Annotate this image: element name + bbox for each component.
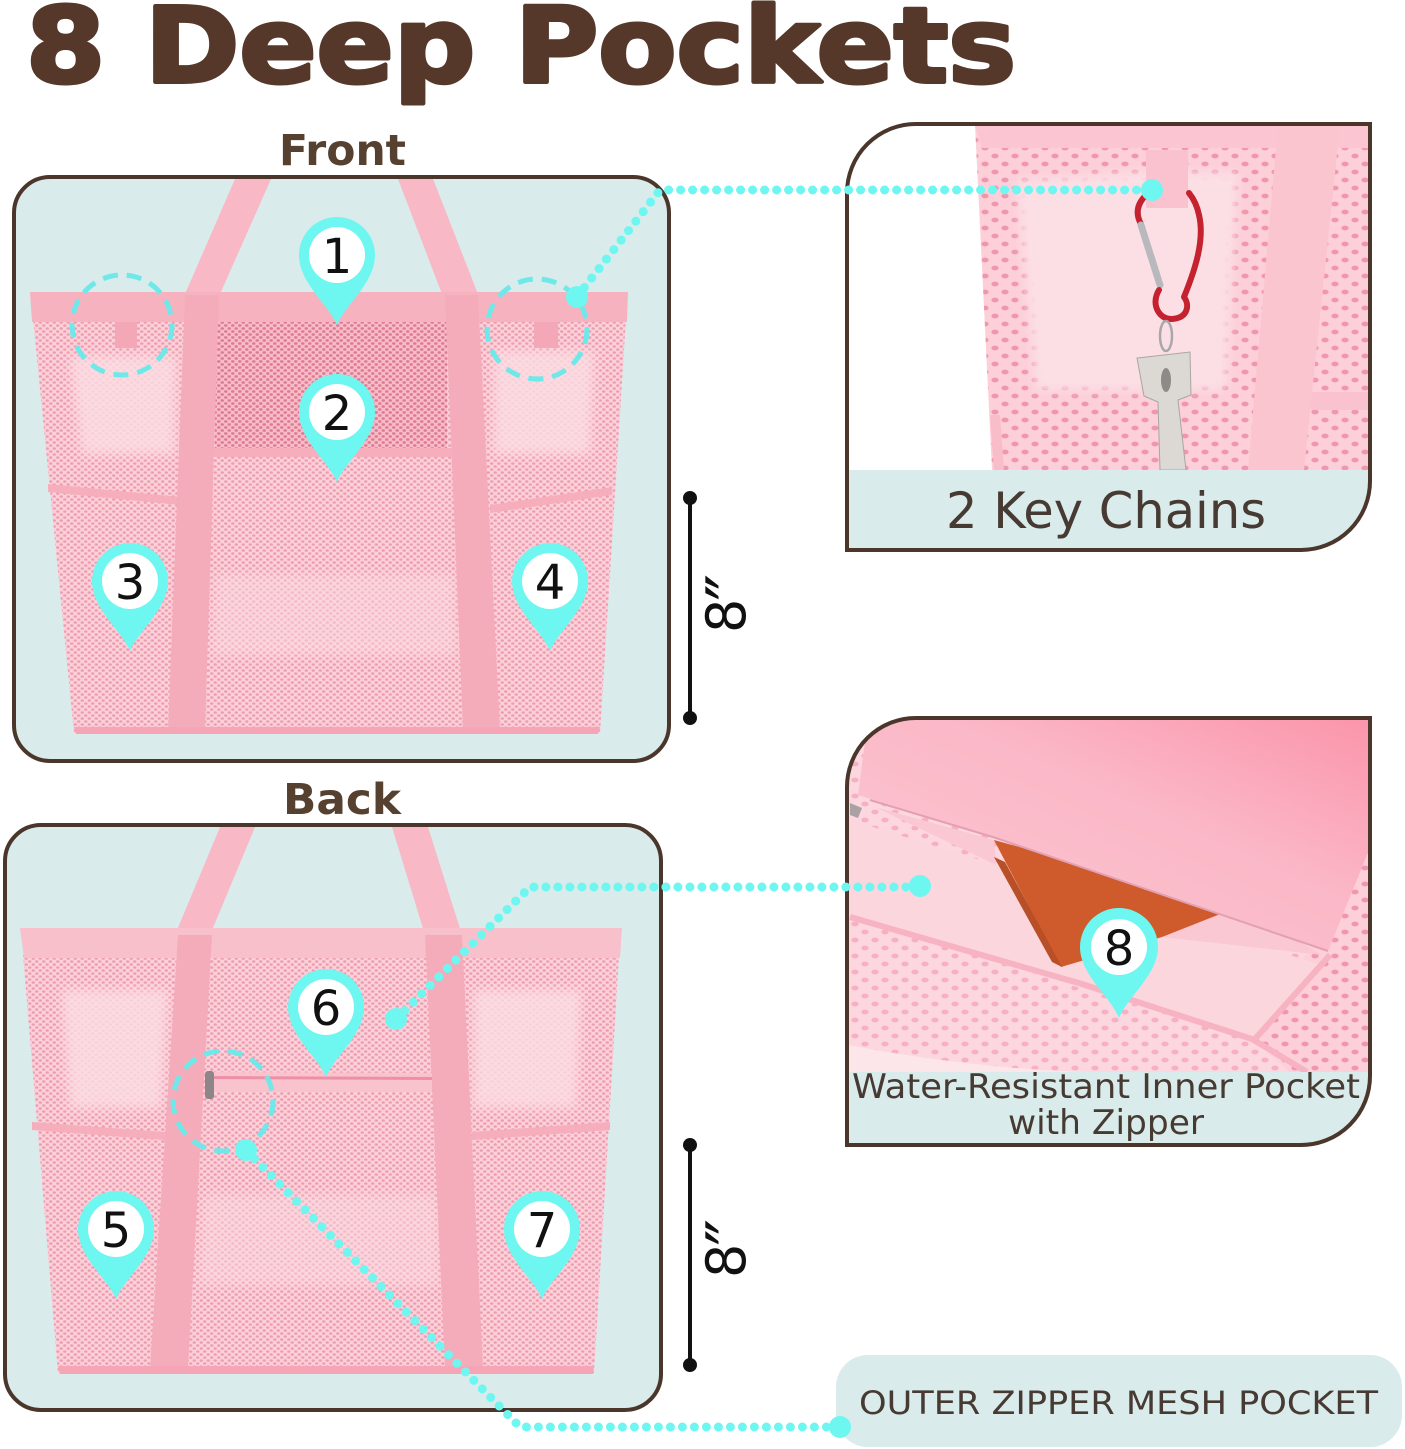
callout: outer zipper mesh pocket: OUTER ZIPPER MESH POCKET — [859, 1384, 1378, 1422]
pin 5 — [78, 1191, 154, 1299]
panel border — [847, 718, 1370, 1145]
heading: back: Back — [283, 775, 402, 825]
dimension: back height: 8 — [695, 1244, 758, 1278]
pin 1: 1 — [322, 229, 352, 285]
panel: inner pocket — [847, 718, 1370, 1145]
back center light band — [199, 1195, 440, 1285]
pin 1 — [299, 217, 375, 325]
connector: outer zipper pocket — [235, 1139, 851, 1438]
front key tabs — [115, 322, 558, 348]
pin 3: 3 — [115, 555, 145, 611]
pin 8: 8 — [1104, 921, 1134, 977]
pin 8 — [1080, 908, 1158, 1018]
zipper pull — [205, 1071, 214, 1099]
outer zipper band — [206, 1072, 432, 1092]
front center light band — [213, 575, 456, 655]
pin 2 — [299, 374, 375, 482]
pin 3 — [92, 543, 168, 651]
dimension: back height — [683, 1138, 775, 1372]
outer zipper line — [206, 1076, 432, 1080]
front side windows — [70, 351, 594, 454]
back pocket seams — [32, 1122, 610, 1140]
pin 7: 7 — [527, 1203, 557, 1259]
inner pocket photo — [849, 719, 1369, 1072]
pin 6: 6 — [311, 981, 341, 1037]
panel: front bag — [14, 177, 669, 761]
carabiner — [1138, 193, 1201, 319]
zipper marker: dashed circle — [173, 1051, 273, 1151]
back bottom edge — [58, 1366, 594, 1374]
dimension: back height: ″ — [691, 1219, 775, 1246]
caption strip — [849, 470, 1369, 549]
key — [1137, 321, 1191, 470]
caption strip — [849, 1072, 1369, 1144]
caption line 1: Water-Resistant Inner Pocket — [852, 1067, 1360, 1107]
caption line 2: with Zipper — [1008, 1103, 1204, 1143]
pin 7 — [504, 1191, 580, 1299]
panel: back bag — [5, 825, 661, 1410]
pin 4 — [512, 543, 588, 651]
front pocket seams — [48, 448, 612, 513]
front straps — [168, 295, 500, 730]
heading: front: Front — [279, 126, 406, 176]
pin 6 — [288, 969, 364, 1077]
dimension: front height — [683, 491, 775, 725]
dimension: front height: 8 — [695, 599, 758, 633]
back bag body — [23, 955, 619, 1373]
back side windows — [62, 990, 581, 1108]
connector: inner pocket — [385, 875, 931, 1030]
back handles — [175, 827, 462, 935]
connector: key chains — [566, 179, 1163, 308]
panel border — [847, 124, 1370, 550]
back straps — [150, 935, 483, 1368]
callout: outer zipper mesh pocket — [836, 1355, 1402, 1447]
front bottom edge — [74, 727, 600, 734]
key chain marker: left dashed circle — [72, 275, 172, 375]
front center dark panel — [215, 322, 447, 450]
pin 5: 5 — [101, 1203, 131, 1259]
pin 4: 4 — [535, 555, 565, 611]
dimension: front height: ″ — [691, 574, 775, 601]
caption: 2 Key Chains — [946, 482, 1266, 540]
key chain marker: right dashed circle — [487, 279, 587, 379]
panel: key chains — [847, 124, 1371, 550]
key chain photo — [975, 125, 1371, 470]
pin 2: 2 — [322, 386, 352, 442]
front rim — [30, 292, 628, 322]
front handles — [185, 179, 478, 294]
front bag body — [33, 318, 626, 733]
back rim — [20, 928, 622, 958]
